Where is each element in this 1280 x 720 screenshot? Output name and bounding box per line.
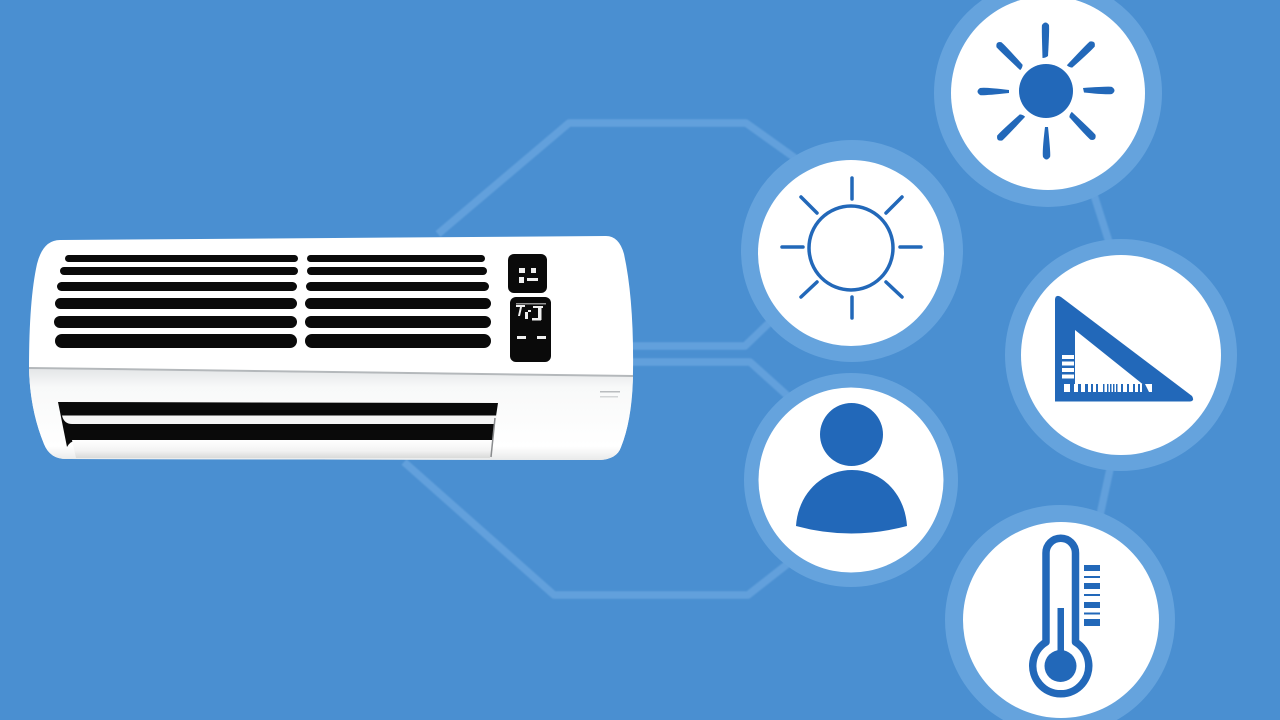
icon: person <box>796 403 907 534</box>
lower panel <box>29 369 633 460</box>
upper vents left <box>54 255 298 348</box>
upper vents right <box>305 255 491 348</box>
small badge <box>600 391 620 398</box>
display panel <box>508 254 551 362</box>
icon: thermometer <box>1033 538 1100 694</box>
node: top solid sun <box>934 0 1162 207</box>
icon: solid sun <box>978 22 1114 160</box>
panel seam <box>29 368 633 376</box>
connector lines <box>404 123 1112 595</box>
icon: set square ruler <box>1055 296 1193 402</box>
node: set square <box>1005 239 1237 471</box>
unit body <box>29 236 633 460</box>
icon: outlined sun <box>782 178 921 318</box>
air conditioner unit <box>29 236 633 460</box>
lower air outlet <box>58 402 498 458</box>
node: outlined sun <box>741 140 963 362</box>
node: person <box>744 373 958 587</box>
node: thermometer <box>945 505 1175 720</box>
